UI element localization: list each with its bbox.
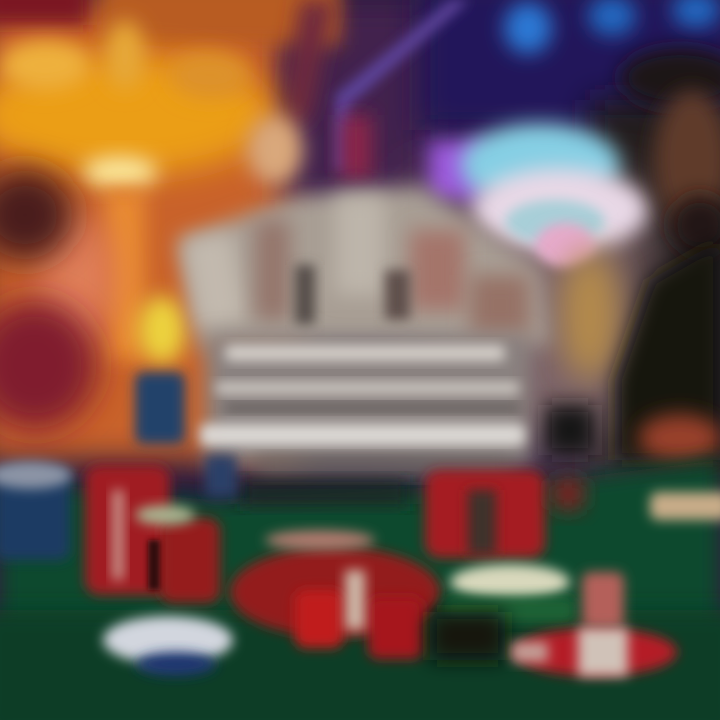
blue chip stacks — [0, 372, 237, 560]
neon rainbow — [428, 123, 648, 380]
blurred title block on cards — [200, 335, 530, 504]
figure: person on left — [0, 169, 97, 430]
red and white chip row — [512, 628, 677, 676]
red chip stack right — [425, 470, 584, 558]
white and blue chip — [103, 616, 233, 676]
green table — [0, 460, 720, 720]
figure: man on right — [545, 48, 720, 462]
centre chip pile — [230, 530, 440, 659]
purple light beam — [335, 0, 470, 180]
green and white chips right — [430, 564, 624, 660]
blue lights — [504, 0, 720, 54]
red chip stack left — [85, 465, 220, 603]
golden chandelier glow — [0, 0, 340, 364]
playing cards fan — [178, 185, 550, 350]
